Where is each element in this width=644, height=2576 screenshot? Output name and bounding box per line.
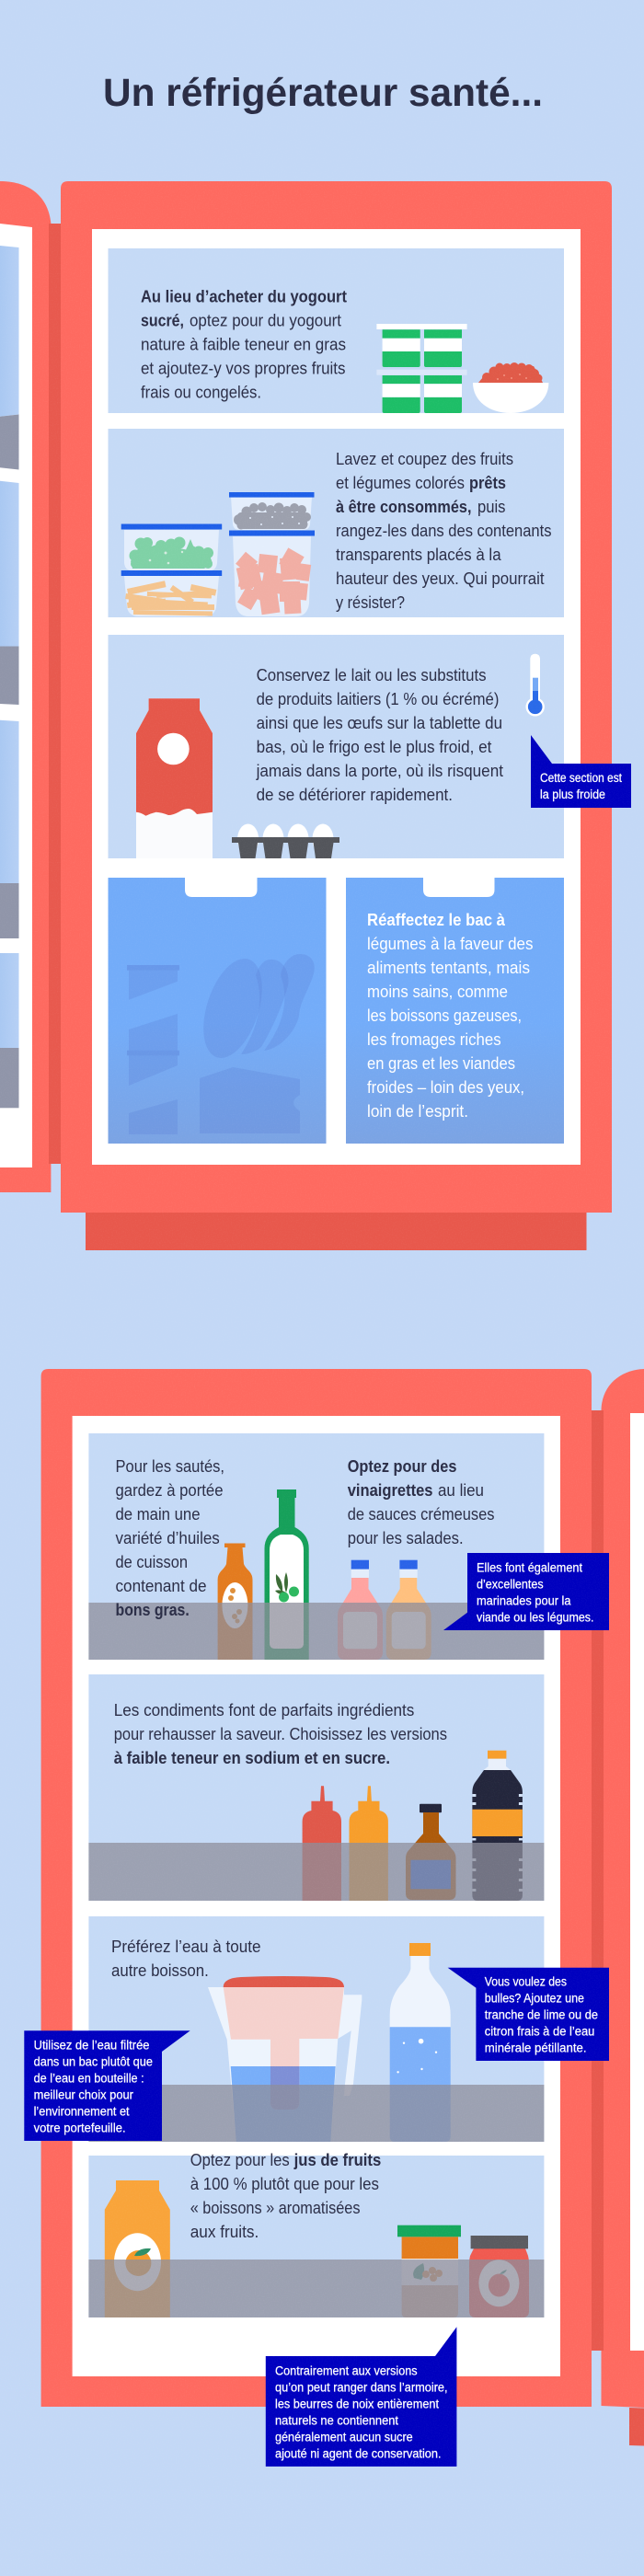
text: wash and cut tip: y résister? [336,593,405,612]
text: water tip: Préférez l’eau à toute [111,1938,261,1956]
text: crisper drawer tip: aliments tentants, mais [367,959,530,977]
icon: container of blueberries [231,497,312,530]
panel: first fridge interior [92,229,581,1165]
text: juice tip: Optez pour les [190,2151,290,2169]
icon: container of carrot sticks [124,576,219,616]
text: cooking oils tip: Pour les sautés, [116,1457,224,1476]
text: cooking oils tip: variété d’huiles [116,1529,220,1547]
icon: faded soda cans and meat [127,951,315,1134]
shelf shadow band [88,1603,544,1660]
text: crisper drawer tip: les boissons gazeuses, [367,1006,522,1025]
panel: shelf prepared fruits and vegetables [109,429,564,617]
callout: sparkling water: citron frais à de l’eau [485,2024,594,2038]
icon: large dark bottle [472,1751,523,1901]
text: milk and eggs tip: bas, où le frigo est le plus froid, et [257,738,491,756]
text: wash and cut tip: et légumes colorés [336,474,465,492]
callout: coldest section: la plus froide [540,788,605,801]
panel: shelf yogurt [109,248,564,413]
callout: natural nut butters: qu’on peut ranger dans l’armoire, [275,2381,448,2395]
callout: filtered water: de l’eau en bouteille : [34,2071,144,2085]
text: crisper drawer tip: légumes à la faveur des [367,935,534,953]
text: vinaigrettes tip: pour les salades. [348,1529,464,1547]
panel: right drawer [346,878,564,1144]
icon: green olive oil bottle [265,1489,309,1660]
text: vinaigrettes tip [348,1457,495,1547]
panel: shelf juices and nut butters [88,2151,544,2317]
callout: sparkling water: Vous voulez des [485,1974,567,1988]
panel: shelf condiments [88,1674,544,1901]
callout: sparkling water [448,1968,609,2061]
callout: sparkling water: bulles? Ajoutez une [485,1991,584,2005]
icon: stacked yogurt tubs [376,324,467,413]
icon: thermometer [526,654,545,716]
callout: vinaigrette marinades: marinades pour la [477,1593,571,1607]
text: wash and cut tip: Lavez et coupez des fruits [336,450,513,468]
text: cooking oils tip [116,1457,224,1619]
panel: fridge hinge strip [49,224,61,1164]
text: crisper drawer tip: Réaffectez le bac à [367,911,506,929]
icon: pink vinaigrette bottle [338,1560,383,1660]
icon: container of melon cubes [233,536,311,616]
icon: container lids [121,492,315,576]
icon: egg tray [232,824,339,858]
text: crisper drawer tip: en gras et les viandes [367,1054,515,1073]
text: crisper drawer tip: loin de l’esprit. [367,1102,468,1121]
text: yogurt tip: nature à faible teneur en gras [141,335,346,353]
text: condiments tip: à faible teneur en sodium et en sucre. [114,1749,390,1767]
text: juice tip: « boissons » aromatisées [190,2199,361,2217]
panel: first fridge frame [61,181,612,1213]
text: milk and eggs tip: de se détériorer rapidement. [257,786,453,804]
icon: orange vinaigrette bottle [386,1560,431,1660]
callout: sparkling water: minérale pétillante. [485,2041,587,2054]
text: wash and cut tip: prêts [469,474,506,492]
text: milk and eggs tip: Conservez le lait ou les substituts [257,666,487,684]
panel: left drawer [109,878,326,1144]
title: Un réfrigérateur santé... [103,71,543,115]
icon: sparkling water bottle [390,1943,451,2142]
text: juice tip: aux fruits. [190,2223,259,2241]
callout: filtered water: l’environnement et [34,2104,130,2118]
panel: shelf milk and eggs [109,635,564,858]
text: wash and cut tip: transparents placés à la [336,546,502,564]
text: wash and cut tip: à être consommés, [336,498,471,516]
callout: filtered water: Utilisez de l’eau filtrée [34,2038,149,2052]
callout: vinaigrette marinades: viande ou les légumes. [477,1610,594,1624]
text: wash and cut tip: hauteur des yeux. Qui pourrait [336,569,545,588]
icon: ketchup bottle [303,1786,341,1901]
callout: filtered water: votre portefeuille. [34,2121,126,2134]
callout: sparkling water: tranche de lime ou de [485,2007,598,2021]
text: condiments tip: pour rehausser la saveur. Choisissez les versions [114,1725,447,1743]
shelf shadow band [88,2085,544,2142]
callout: natural nut butters: généralement aucun sucre [275,2431,413,2444]
panel: shelf oils and vinaigrettes [88,1433,544,1660]
text: crisper drawer tip [367,911,534,1121]
panel: second fridge hinge strip [592,1410,604,2351]
text: water tip: autre boisson. [111,1961,209,1980]
text: cooking oils tip: gardez à portée [116,1481,223,1500]
panel: fridge base shadow [86,1213,587,1250]
text: cooking oils tip: de main une [116,1505,201,1524]
text: condiments tip [114,1701,447,1767]
callout: natural nut butters: les beurres de noix entièrement [275,2398,439,2411]
text: milk and eggs tip: ainsi que les œufs sur la tablette du [257,714,502,732]
shelf shadow band [88,1843,544,1901]
text: yogurt tip: frais ou congelés. [141,383,261,401]
text: wash and cut tip: puis [477,498,506,516]
panel: open left door of the first fridge [0,181,51,1192]
callout: natural nut butters: Contrairement aux versions [275,2364,418,2378]
text: yogurt tip: et ajoutez-y vos propres fruits [141,359,346,377]
text: yogurt tip [141,287,347,401]
icon: nut butter jar [397,2225,461,2317]
panel: shelf water [88,1916,544,2142]
text: wash and cut tip: rangez-les dans des contenants [336,522,552,540]
callout: vinaigrette marinades [443,1553,609,1630]
panel: second fridge interior [73,1416,560,2376]
text: juice tip [190,2151,381,2241]
text: juice tip: jus de fruits [293,2151,381,2169]
icon: container of broccoli [124,530,219,570]
text: wash and cut tip [336,450,552,612]
shelf shadow band [88,2260,544,2317]
icon: soy sauce bottle [406,1804,456,1900]
callout: coldest section: Cette section est [540,771,622,785]
icon: bowl of berries [473,362,548,413]
text: crisper drawer tip: moins sains, comme [367,983,508,1001]
callout: filtered water: meilleur choix pour [34,2087,133,2101]
icon: jam jar [469,2236,529,2317]
text: crisper drawer tip: les fromages riches [367,1030,501,1049]
text: vinaigrettes tip: vinaigrettes [348,1481,432,1500]
text: milk and eggs tip: de produits laitiers (1 % ou écrémé) [257,690,499,708]
text: vinaigrettes tip: Optez pour des [348,1457,456,1476]
icon: mustard bottle [350,1786,388,1901]
callout: natural nut butters: naturels ne contiennent [275,2414,398,2428]
callout: vinaigrette marinades: Elles font également [477,1560,582,1574]
callout: natural nut butters: ajouté ni agent de conservation. [275,2447,442,2461]
callout: vinaigrette marinades: d’excellentes [477,1577,544,1591]
text: condiments tip: Les condiments font de parfaits ingrédients [114,1701,414,1719]
text: juice tip: à 100 % plutôt que pour les [190,2175,379,2193]
callout: filtered water: dans un bac plutôt que [34,2054,153,2068]
text: vinaigrettes tip: au lieu [438,1481,484,1500]
text: yogurt tip: Au lieu d’acheter du yogourt [141,287,347,305]
panel: open right door of the second fridge [602,1369,644,2445]
panel: second fridge frame [41,1369,592,2407]
icon: filter pitcher [208,1976,362,2142]
text: water tip [111,1938,261,1980]
icon: milk carton [136,698,213,858]
text: vinaigrettes tip: de sauces crémeuses [348,1505,495,1524]
text: milk and eggs tip [256,666,503,804]
callout: natural nut butters [266,2327,456,2467]
text: cooking oils tip: de cuisson [116,1553,188,1571]
icon: orange juice carton [105,2180,170,2317]
text: milk and eggs tip: jamais dans la porte, où ils risquent [256,762,503,780]
text: yogurt tip: sucré, [141,311,184,329]
callout: coldest section [531,735,631,808]
callout: filtered water [24,2030,190,2141]
text: yogurt tip: optez pour du yogourt [190,311,341,329]
text: crisper drawer tip: froides – loin des yeux, [367,1078,524,1097]
text: cooking oils tip: contenant de [116,1577,206,1595]
icon: orange oil bottle [218,1544,252,1660]
text: cooking oils tip: bons gras. [116,1601,190,1619]
